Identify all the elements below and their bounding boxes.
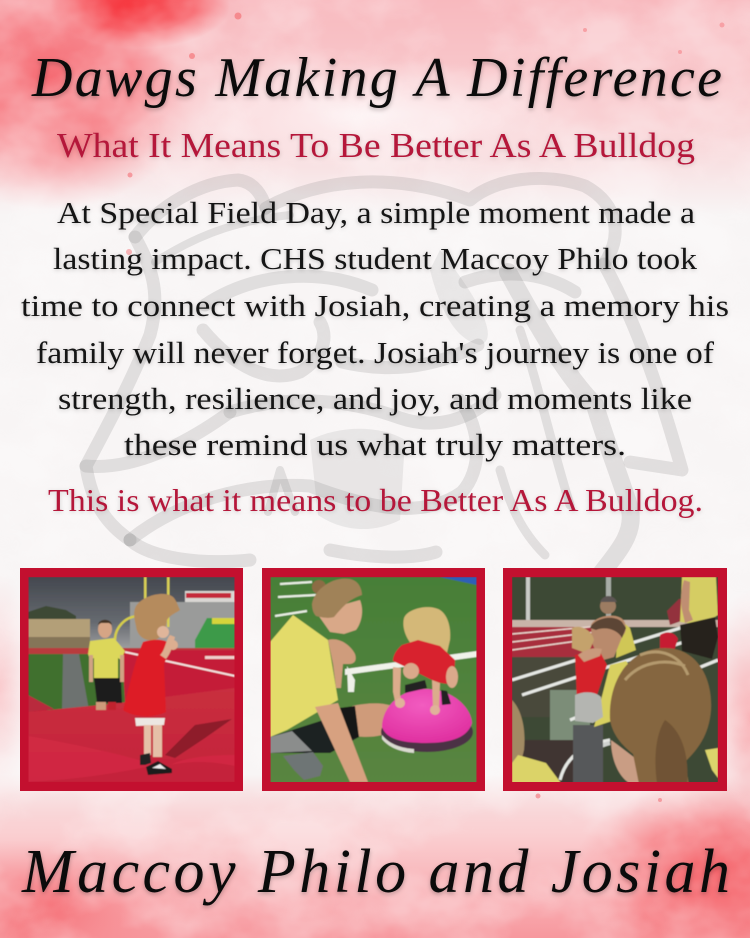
figure: foreground woman with ponytail (512, 648, 718, 784)
figure: background spectators (600, 577, 718, 659)
pink balance dome (381, 689, 473, 753)
photo panel: student hugging child in bleachers (503, 568, 727, 791)
title: Dawgs Making A Difference (31, 47, 722, 109)
body paragraph: strength, resilience, and joy, and moments like (58, 381, 692, 416)
figure: student holding child (572, 616, 634, 727)
body paragraph: these remind us what truly matters. (124, 427, 626, 462)
body paragraph: lasting impact. CHS student Maccoy Philo took (53, 241, 698, 276)
figure: student in yellow (88, 620, 125, 710)
body paragraph: At Special Field Day, a simple moment made a (57, 195, 695, 230)
figure: child in red (123, 594, 180, 775)
subtitle: What It Means To Be Better As A Bulldog (57, 126, 695, 165)
photo panel: student kneeling beside child on pink dome (262, 568, 485, 791)
photo panel: student and child on red mat (20, 568, 243, 791)
body paragraph (21, 195, 729, 462)
body paragraph: family will never forget. Josiah's journey is one of (36, 335, 715, 370)
body paragraph: time to connect with Josiah, creating a memory his (21, 288, 729, 323)
closing statement: This is what it means to be Better As A Bulldog. (48, 482, 703, 518)
figure: kneeling student (270, 579, 394, 782)
figure: child on dome (393, 607, 458, 715)
footer names: Maccoy Philo and Josiah (21, 838, 730, 906)
bulldog watermark (86, 178, 682, 575)
